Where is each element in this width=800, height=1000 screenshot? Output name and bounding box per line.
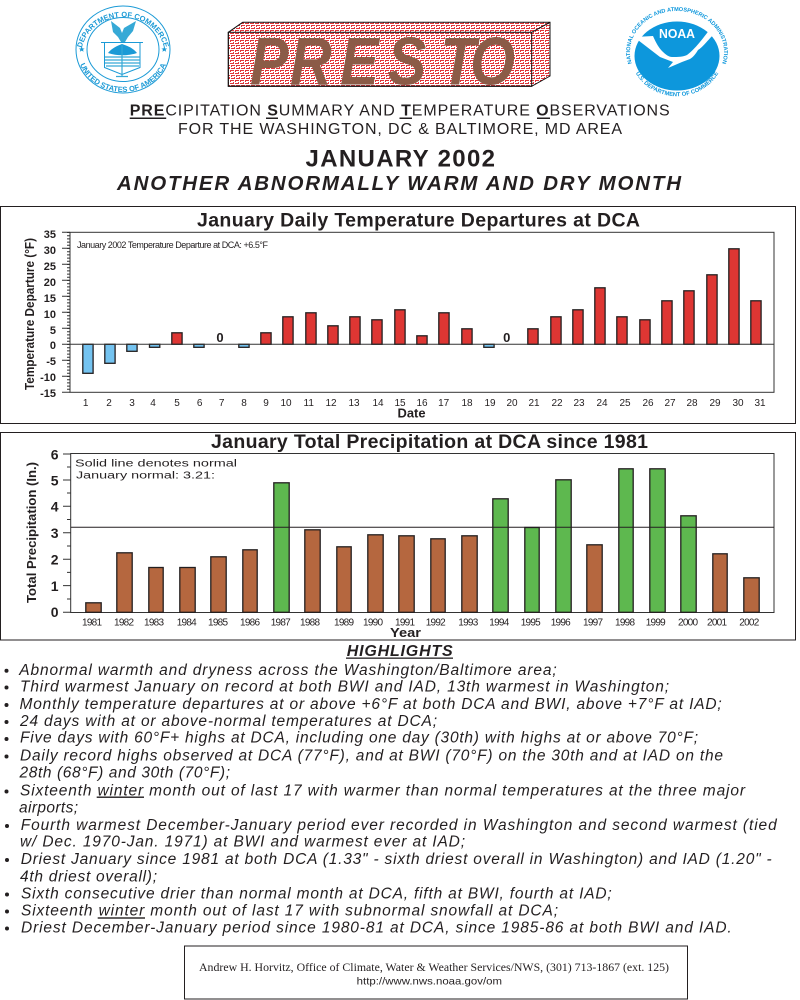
credit line: Andrew H. Horvitz, Office of Climate, Water & Weather Services/NWS, (301) 713-1867 (ext. 125) xyxy=(199,962,669,974)
x axis labels: 3 xyxy=(129,398,135,409)
x axis labels: 13 xyxy=(348,398,360,409)
highlight lines: Driest December-January period since 1980-81 at DCA, since 1985-86 at both BWI and IAD. xyxy=(21,919,732,936)
x axis labels: 10 xyxy=(280,398,292,409)
x axis title: Date xyxy=(398,407,426,421)
y axis labels: 20 xyxy=(44,277,56,289)
highlight lines: 4th driest overall); xyxy=(20,869,157,886)
highlight lines: Monthly temperature departures at or above +6°F at both DCA and BWI, above +7°F at IAD; xyxy=(20,696,722,713)
title: January 2002: JANUARY 2002 xyxy=(306,146,495,173)
x axis labels: 2001 xyxy=(707,618,727,629)
above-normal bars xyxy=(274,469,696,612)
highlight lines: Sixteenth winter month out of last 17 with subnormal snowfall at DCA; xyxy=(21,903,558,920)
normal line xyxy=(71,526,774,528)
x axis labels: 4 xyxy=(150,398,156,409)
highlight lines: Sixth consecutive drier than normal month at DCA, fifth at BWI, fourth at IAD; xyxy=(21,885,612,902)
x axis labels: 2000 xyxy=(678,618,698,629)
x axis labels: 6 xyxy=(197,398,203,409)
logo: NOAA seal: U.S. DEPARTMENT OF COMMERCE xyxy=(636,71,718,96)
highlight lines: 24 days with at or above-normal temperatures at DCA; xyxy=(19,713,437,730)
x axis labels: 1 xyxy=(83,398,89,409)
x axis labels: 25 xyxy=(619,398,631,409)
heading: PRESTO expansion: PRECIPITATION SUMMARY AND TEMPERATURE OBSERVATIONS xyxy=(130,103,670,120)
highlight lines: Five days with 60°F+ highs at DCA, including one day (30th) with highs at or above 70°F; xyxy=(20,730,698,747)
subtitle: ANOTHER ABNORMALLY WARM AND DRY MONTH xyxy=(116,172,682,195)
zero value labels: 0 xyxy=(216,330,224,345)
x axis labels: 1998 xyxy=(615,618,635,629)
x axis labels: 5 xyxy=(174,398,180,409)
logo: NOAA seal xyxy=(626,7,728,96)
x axis labels: 31 xyxy=(754,398,766,409)
logo: NOAA seal: NATIONAL OCEANIC AND ATMOSPHERIC ADMINISTRATION xyxy=(626,7,728,64)
x axis labels: 1993 xyxy=(458,618,479,629)
y axis labels: 25 xyxy=(44,261,56,273)
y axis labels: 6 xyxy=(51,446,59,462)
x axis labels: 1994 xyxy=(489,618,510,629)
x axis labels: 1991 xyxy=(395,618,415,629)
y axis labels: 0 xyxy=(51,604,59,620)
logo: PRESTO block: PRESTO xyxy=(250,24,515,100)
x axis labels: 28 xyxy=(686,398,698,409)
x axis labels: 12 xyxy=(325,398,337,409)
x axis labels: 1997 xyxy=(583,618,603,629)
x axis labels: 17 xyxy=(438,398,450,409)
x axis labels: 18 xyxy=(461,398,473,409)
x axis labels: 11 xyxy=(304,398,314,409)
x axis labels: 1990 xyxy=(363,618,383,629)
x axis labels: 15 xyxy=(394,398,406,409)
x axis labels: 1984 xyxy=(177,618,197,629)
y axis labels: 15 xyxy=(44,293,56,305)
x axis title: Year xyxy=(390,626,421,640)
y axis labels: 0 xyxy=(50,340,56,352)
x axis labels: 19 xyxy=(484,398,496,409)
y axis labels: 2 xyxy=(51,552,59,568)
x axis labels: 16 xyxy=(416,398,428,409)
y axis labels xyxy=(51,446,59,620)
x axis labels: 29 xyxy=(709,398,721,409)
x axis labels xyxy=(82,618,760,629)
y axis labels xyxy=(40,229,56,400)
x axis labels: 8 xyxy=(241,398,247,409)
annotation: January 2002 Temperature Departure at DCA: +6.5°F xyxy=(77,240,268,250)
y axis labels: 3 xyxy=(51,525,59,541)
y axis labels: -5 xyxy=(46,356,56,368)
y axis labels: 4 xyxy=(51,498,59,514)
x axis labels: 21 xyxy=(528,398,540,409)
x axis labels: 1992 xyxy=(426,618,446,629)
highlights list xyxy=(4,662,778,936)
x axis labels: 1982 xyxy=(114,618,134,629)
x axis labels: 24 xyxy=(596,398,608,409)
positive departure bars xyxy=(172,249,761,344)
bullets xyxy=(4,669,9,930)
x axis labels: 2002 xyxy=(739,618,760,629)
footer credit box xyxy=(184,946,688,999)
y axis ticks xyxy=(63,454,71,612)
y axis labels: 5 xyxy=(51,472,59,488)
x axis labels: 23 xyxy=(573,398,585,409)
chart title: January Daily Temperature Departures at DCA xyxy=(197,210,640,232)
x axis labels: 1986 xyxy=(240,618,260,629)
y axis labels: 5 xyxy=(50,325,56,337)
x axis labels: 1987 xyxy=(271,618,291,629)
winter underlines xyxy=(97,796,145,919)
x axis labels: 20 xyxy=(506,398,518,409)
logo: Department of Commerce seal: DEPARTMENT OF COMMERCE xyxy=(77,12,169,48)
highlight lines: Fourth warmest December-January period ever recorded in Washington and second warmest (tied xyxy=(21,817,778,834)
url line: http://www.nws.noaa.gov/om xyxy=(357,975,502,987)
y axis labels: -15 xyxy=(40,388,56,400)
x axis labels: 1999 xyxy=(646,618,666,629)
x axis labels: 27 xyxy=(664,398,676,409)
y axis labels: -10 xyxy=(40,372,56,384)
x axis labels: 1996 xyxy=(551,618,571,629)
zero value labels xyxy=(216,330,510,345)
logo: Department of Commerce seal: UNITED STATES OF AMERICA xyxy=(80,62,166,92)
y axis labels: 1 xyxy=(51,578,59,594)
negative departure bars xyxy=(83,344,494,373)
x axis labels: 1981 xyxy=(82,618,102,629)
chart title: January Total Precipitation at DCA since 1981 xyxy=(211,431,648,453)
highlight lines: Third warmest January on record at both BWI and IAD, 13th warmest in Washington; xyxy=(20,679,669,696)
plot area xyxy=(71,454,774,612)
heading: PRESTO expansion xyxy=(130,103,670,138)
highlight lines: Daily record highs observed at DCA (77°F), and at BWI (70°F) on the 30th and at IAD on the xyxy=(20,748,723,765)
logo: NOAA seal: NOAA xyxy=(659,26,696,41)
annotation xyxy=(75,459,237,482)
y axis title: Temperature Departure (°F) xyxy=(22,238,37,390)
y axis labels: 35 xyxy=(44,229,56,241)
x axis labels: 14 xyxy=(372,398,384,409)
zero value labels: 0 xyxy=(503,330,510,345)
x axis labels: 9 xyxy=(263,398,269,409)
x axis labels: 1995 xyxy=(521,618,541,629)
highlight lines: 28th (68°F) and 30th (70°F); xyxy=(18,765,230,782)
x axis labels xyxy=(83,398,766,409)
heading: PRESTO expansion: FOR THE WASHINGTON, DC & BALTIMORE, MD AREA xyxy=(178,121,622,138)
panel: daily temperature departures xyxy=(0,206,796,424)
highlight lines: w/ Dec. 1970-Jan. 1971) at BWI and warmest ever at IAD; xyxy=(20,834,465,851)
x axis labels: 26 xyxy=(642,398,654,409)
x axis labels: 1985 xyxy=(208,618,228,629)
x axis labels: 30 xyxy=(732,398,744,409)
x axis labels: 22 xyxy=(551,398,563,409)
highlight lines: Sixteenth winter month out of last 17 with warmer than normal temperatures at the three major xyxy=(20,783,746,800)
highlight lines: Driest January since 1981 at both DCA (1.33" - sixth driest overall in Washington) and IAD (1.20" - xyxy=(21,851,772,868)
below-normal bars xyxy=(86,530,759,612)
panel: total precipitation xyxy=(0,431,796,640)
y axis ticks xyxy=(62,232,70,392)
highlight lines: airports; xyxy=(19,800,78,817)
x axis labels: 1988 xyxy=(300,618,320,629)
y axis labels: 30 xyxy=(44,245,56,257)
plot area xyxy=(70,232,774,392)
x axis labels: 7 xyxy=(219,398,225,409)
annotation: January normal: 3.21: xyxy=(76,471,215,482)
y axis labels: 10 xyxy=(44,309,56,321)
logo: Department of Commerce seal xyxy=(76,6,170,94)
zero line xyxy=(70,343,774,345)
highlights heading: HIGHLIGHTS xyxy=(347,643,453,660)
annotation: Solid line denotes normal xyxy=(75,459,237,470)
x axis labels: 1983 xyxy=(144,618,164,629)
x axis labels: 1989 xyxy=(334,618,354,629)
highlight lines xyxy=(18,662,778,936)
x axis labels: 2 xyxy=(106,398,112,409)
highlight lines: Abnormal warmth and dryness across the Washington/Baltimore area; xyxy=(18,662,557,679)
y axis title: Total Precipitation (In.) xyxy=(24,462,39,603)
